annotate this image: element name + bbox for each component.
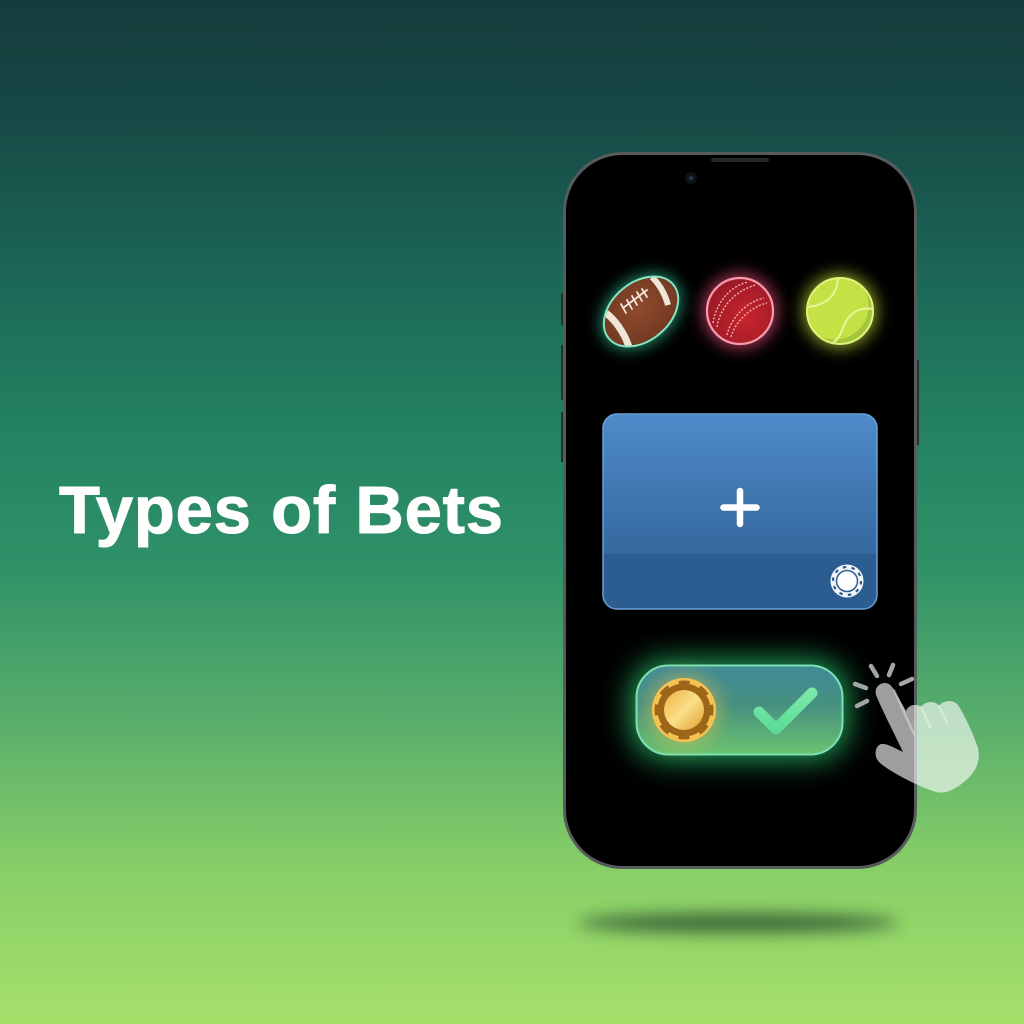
card footer band <box>603 554 877 609</box>
earpiece <box>711 158 769 162</box>
bet slip card <box>603 414 877 609</box>
phone body <box>564 154 916 868</box>
tap rays <box>855 665 912 706</box>
finger creases <box>894 690 947 734</box>
phone shadow <box>578 913 898 933</box>
icon: plus <box>724 491 756 524</box>
icon: american football <box>590 263 692 360</box>
title: Types of Bets <box>59 473 503 548</box>
confirm bet toggle <box>632 661 847 759</box>
side buttons <box>561 293 919 462</box>
icon: tennis ball <box>802 272 877 348</box>
icon: check mark <box>759 693 812 729</box>
icon: tapping hand <box>855 665 979 793</box>
icon: poker chip <box>830 564 864 598</box>
camera <box>685 172 697 184</box>
phone <box>561 154 919 868</box>
hand shape <box>876 683 979 793</box>
icon: cricket ball <box>703 274 777 348</box>
icon: gold chip <box>646 672 722 748</box>
